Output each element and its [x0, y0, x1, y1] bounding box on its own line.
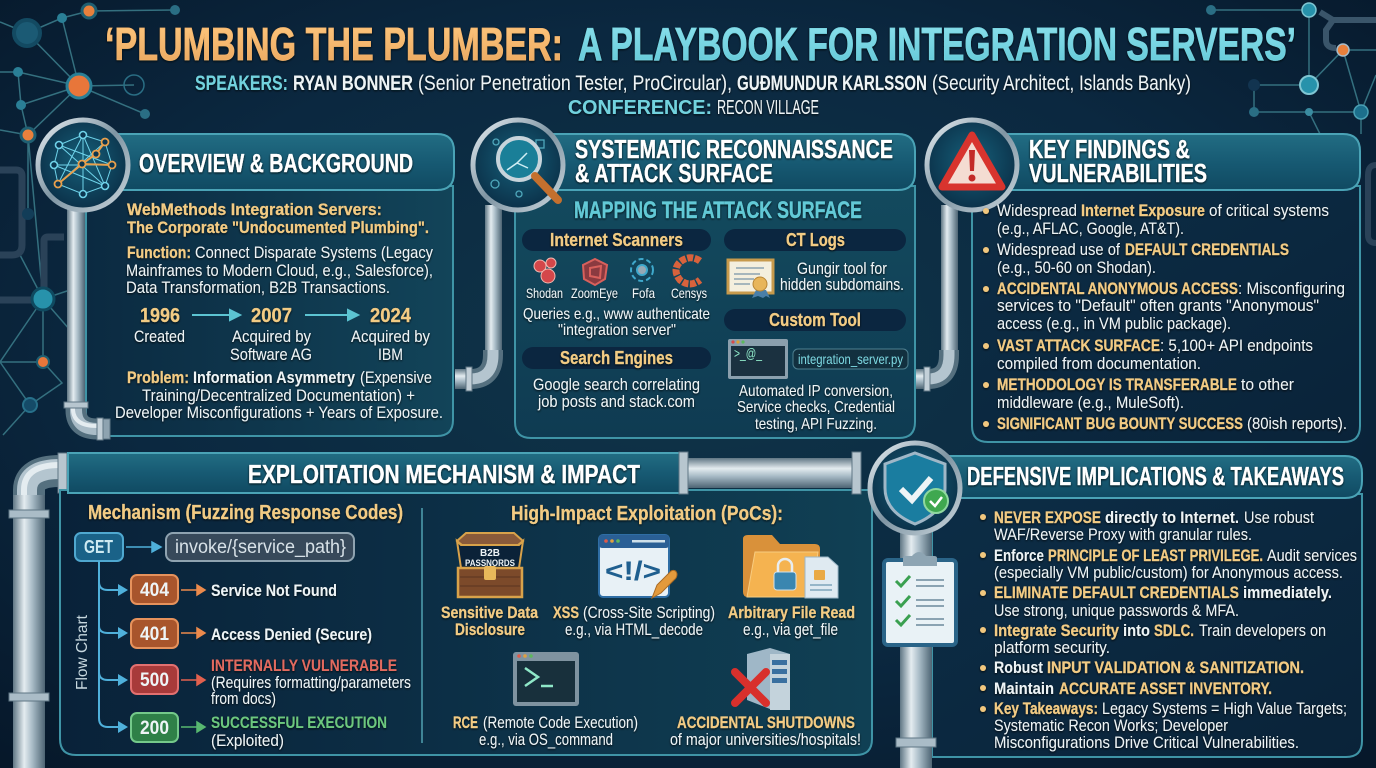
- sensitive data label: Sensitive Data: [441, 603, 538, 622]
- pill: custom tool: [724, 309, 906, 331]
- pill: internet scanners: Internet Scanners: [550, 230, 683, 250]
- icon: clipboard checklist: [884, 552, 956, 645]
- shutdowns label: [670, 713, 861, 749]
- scanner labels: Shodan: [526, 285, 563, 301]
- findings bullets: Widespread: [997, 201, 1077, 220]
- icon: zoomeye: [583, 259, 607, 285]
- title: [105, 18, 1296, 70]
- defensive bullets: Enforce: [994, 546, 1044, 565]
- arrow: [305, 310, 358, 320]
- xss label: (Cross-Site Scripting): [583, 603, 715, 622]
- findings bullets: Widespread use of: [997, 240, 1120, 259]
- findings heading: VULNERABILITIES: [1029, 158, 1207, 188]
- overview body: [86, 186, 453, 436]
- findings bullets: : Misconfiguring: [1238, 279, 1345, 298]
- timeline: [134, 305, 430, 364]
- conference line: RECON VILLAGE: [717, 97, 819, 119]
- findings bullets: : 5,100+ API endpoints: [1160, 336, 1313, 355]
- timeline 2007: Software AG: [230, 345, 312, 364]
- background network: top right: [1206, 3, 1376, 243]
- code 401 row: Access Denied (Secure): [211, 625, 372, 644]
- arrow: [192, 310, 240, 320]
- xss label: XSS: [553, 603, 579, 622]
- code 500 row: (Requires formatting/parameters: [211, 673, 411, 692]
- flow chart label: Flow Chart: [74, 614, 91, 690]
- defensive bullets: PRINCIPLE OF LEAST PRIVILEGE.: [1048, 546, 1263, 565]
- problem text: [115, 368, 443, 422]
- findings heading: [1029, 134, 1207, 188]
- overview intro text: WebMethods Integration Servers:: [127, 200, 382, 219]
- file read label: [728, 603, 855, 639]
- icon: shodan: [534, 258, 556, 283]
- flow chart branch lines: [99, 561, 122, 727]
- code 200 row: 200: [140, 718, 169, 739]
- panel: defensive implications: [870, 443, 1362, 768]
- icon: warning badge: [927, 120, 1017, 210]
- custom tool text: [737, 383, 895, 433]
- defensive bullets: Robust: [994, 658, 1043, 677]
- panel: exploitation mechanism and impact: [60, 452, 872, 755]
- icon: xss window: <!/>: [605, 556, 661, 586]
- timeline 2007: Acquired by: [232, 327, 311, 346]
- findings bullets: of critical systems: [1209, 201, 1329, 220]
- timeline 2007: [230, 305, 312, 364]
- defensive header bar: [930, 456, 1362, 498]
- pill: ct logs: [724, 229, 906, 251]
- recon connecting pipe: [455, 205, 502, 391]
- scanner labels: Censys: [671, 285, 707, 301]
- file read label: Arbitrary File Read: [728, 603, 855, 622]
- recon body: [515, 186, 915, 438]
- recon heading: SYSTEMATIC RECONNAISSANCE: [575, 134, 893, 164]
- defensive bullets: NEVER EXPOSE: [994, 508, 1101, 527]
- recon header bar: [540, 134, 915, 190]
- function text: [126, 243, 433, 297]
- speakers line: SPEAKERS:: [195, 72, 288, 95]
- findings body: [972, 186, 1360, 442]
- speakers line: [195, 72, 1191, 95]
- findings bullets: METHODOLOGY IS TRANSFERABLE: [997, 375, 1237, 394]
- panel: overview and background: [38, 120, 454, 440]
- findings bullets: DEFAULT CREDENTIALS: [1125, 240, 1289, 259]
- problem text: Developer Misconfigurations + Years of Exposure.: [115, 403, 443, 422]
- defensive bullets: Maintain: [994, 679, 1054, 698]
- icon: censys: [676, 258, 700, 284]
- icon: shield badge: [870, 443, 960, 533]
- findings bullets: VAST ATTACK SURFACE: [997, 336, 1160, 355]
- timeline 1996: [134, 305, 185, 346]
- scanner labels: [526, 285, 707, 301]
- pill: search engines: [522, 347, 711, 369]
- function text: Function:: [127, 243, 191, 262]
- findings connecting pipe: [916, 205, 958, 391]
- code 500 row: 500: [140, 670, 169, 691]
- arrow: [126, 542, 161, 552]
- pill: search engines: Search Engines: [560, 348, 673, 368]
- panel: key findings: [916, 120, 1360, 442]
- timeline 2007: 2007: [251, 305, 292, 327]
- code 200 row: SUCCESSFUL EXECUTION: [211, 713, 387, 732]
- findings bullets: ACCIDENTAL ANONYMOUS ACCESS: [997, 279, 1238, 298]
- file name pill: integration_server.py: [798, 351, 903, 367]
- shutdowns label: of major universities/hospitals!: [670, 730, 861, 749]
- function text: Connect Disparate Systems (Legacy: [195, 243, 433, 262]
- defensive vertical pipe: [896, 530, 936, 768]
- conference line: CONFERENCE:: [568, 97, 712, 119]
- defensive bullets: Key Takeaways:: [994, 699, 1098, 718]
- icon: magnifier badge: [473, 120, 563, 210]
- timeline 2024: Acquired by: [351, 327, 430, 346]
- recon heading: & ATTACK SURFACE: [575, 158, 773, 188]
- speakers line: (Senior Penetration Tester, ProCircular),: [418, 72, 732, 95]
- problem text: Training/Decentralized Documentation) +: [142, 386, 415, 405]
- findings bullets: (e.g., AFLAC, Google, AT&T).: [997, 219, 1184, 238]
- speakers line: (Security Architect, Islands Banky): [932, 72, 1191, 95]
- scanner labels: ZoomEye: [571, 285, 618, 301]
- xss label: [553, 603, 715, 639]
- invoke box: invoke/{service_path}: [175, 537, 346, 558]
- code 200 row: (Exploited): [211, 731, 284, 750]
- icon: network badge: [38, 120, 128, 210]
- defensive bullets: ELIMINATE DEFAULT CREDENTIALS: [994, 583, 1239, 602]
- findings bullets: access (e.g., in VM public package).: [997, 314, 1231, 333]
- exploitation heading: EXPLOITATION MECHANISM & IMPACT: [248, 459, 640, 489]
- findings bullets: compiled from documentation.: [997, 354, 1201, 373]
- ct logs text: hidden subdomains.: [780, 275, 904, 294]
- timeline 2024: [351, 305, 430, 364]
- defensive bullets: Use robust: [1244, 508, 1314, 527]
- code 401 row: 401: [140, 624, 169, 645]
- search engines text: job posts and stack.com: [537, 392, 695, 411]
- sensitive data label: [441, 603, 538, 639]
- timeline 2024: IBM: [378, 345, 403, 364]
- defensive bullets: ACCURATE ASSET INVENTORY.: [1059, 679, 1272, 698]
- code 404 row: 404: [140, 580, 169, 601]
- ct logs text: Gungir tool for: [797, 259, 887, 278]
- code 500 row: INTERNALLY VULNERABLE: [211, 656, 397, 675]
- speakers line: RYAN BONNER: [293, 72, 413, 95]
- overview intro text: The Corporate "Undocumented Plumbing".: [127, 218, 429, 237]
- defensive bullets: Misconfigurations Drive Critical Vulnerabilities.: [994, 733, 1299, 752]
- defensive bullets: SDLC.: [1154, 621, 1194, 640]
- code 404 row: [131, 575, 337, 604]
- mechanism heading: Mechanism (Fuzzing Response Codes): [88, 502, 403, 524]
- icon: treasure chest: [457, 533, 523, 597]
- overview intro text: [127, 200, 429, 237]
- defensive bullets: Use strong, unique passwords & MFA.: [994, 601, 1239, 620]
- findings bullets: services to "Default" often grants "Anonymous": [997, 296, 1319, 315]
- icon: treasure chest: PASSNORDS: [465, 558, 515, 568]
- findings bullets: [983, 201, 1347, 433]
- code 200 row: [131, 713, 387, 750]
- code 500 row: from docs): [211, 689, 276, 708]
- ct logs text: [780, 259, 904, 294]
- pill: ct logs: CT Logs: [786, 230, 845, 250]
- high-impact heading: High-Impact Exploitation (PoCs):: [511, 503, 783, 525]
- get box: [75, 533, 123, 561]
- exploitation header bar: [68, 453, 680, 493]
- search engines text: Google search correlating: [533, 375, 700, 394]
- findings bullets: middleware (e.g., MuleSoft).: [997, 393, 1184, 412]
- findings bullets: SIGNIFICANT BUG BOUNTY SUCCESS: [997, 414, 1243, 433]
- overview pipe: [64, 205, 110, 440]
- icon: locked folder: [743, 535, 838, 598]
- problem text: (Expensive: [360, 368, 432, 387]
- defensive bullets: Integrate Security: [994, 621, 1119, 640]
- code 500 row: [131, 656, 411, 708]
- file read label: e.g., via get_file: [743, 620, 838, 639]
- overview heading: OVERVIEW & BACKGROUND: [139, 148, 413, 178]
- title: ‘PLUMBING THE PLUMBER:: [105, 18, 563, 70]
- code 401 row: [131, 619, 372, 648]
- function text: Data Transformation, B2B Transactions.: [126, 278, 390, 297]
- findings header bar: [995, 134, 1360, 190]
- function text: Mainframes to Modern Cloud, e.g., Salesforce),: [126, 261, 433, 280]
- file name pill: [793, 349, 908, 369]
- problem text: Problem:: [127, 368, 189, 387]
- defensive bullets: Audit services: [1267, 546, 1357, 565]
- code 404 row: Service Not Found: [211, 581, 337, 600]
- icon: certificate: [728, 260, 773, 298]
- defensive bullets: [980, 508, 1357, 752]
- icon: terminal: >_@_: [734, 345, 762, 361]
- scanner query text: "integration server": [558, 322, 676, 339]
- column divider: [421, 508, 423, 743]
- icon: rce terminal: [513, 652, 579, 706]
- pill: custom tool: Custom Tool: [769, 310, 861, 330]
- custom tool text: Automated IP conversion,: [739, 383, 893, 400]
- rce label: e.g., via OS_command: [479, 730, 613, 749]
- xss label: e.g., via HTML_decode: [565, 620, 703, 639]
- rce label: [453, 713, 638, 749]
- timeline 1996: 1996: [140, 305, 180, 327]
- search engines text: [533, 375, 700, 411]
- findings bullets: Internet Exposure: [1081, 201, 1205, 220]
- shutdowns label: ACCIDENTAL SHUTDOWNS: [677, 713, 855, 732]
- findings bullets: (80ish reports).: [1247, 414, 1347, 433]
- findings bullets: to other: [1241, 375, 1294, 394]
- sensitive data label: Disclosure: [455, 620, 525, 639]
- background network: top left: [0, 4, 180, 435]
- scanner labels: Fofa: [632, 285, 655, 301]
- icon: fofa: [631, 259, 653, 281]
- scanner query text: Queries e.g., www authenticate: [523, 306, 710, 323]
- get box: GET: [84, 537, 113, 557]
- defensive bullets: platform security.: [994, 638, 1110, 657]
- header connecting pipe: [679, 452, 861, 494]
- conference line: [568, 97, 819, 119]
- icon: treasure chest: B2B: [480, 548, 500, 559]
- scanner query text: [523, 306, 710, 339]
- findings heading: KEY FINDINGS &: [1029, 134, 1190, 164]
- icon: server with red x: [735, 648, 790, 710]
- rce label: (Remote Code Execution): [483, 713, 638, 732]
- problem text: Information Asymmetry: [193, 368, 355, 387]
- speakers line: GUÐMUNDUR KARLSSON: [737, 72, 927, 95]
- custom tool text: testing, API Fuzzing.: [755, 416, 877, 433]
- panel: systematic reconnaissance: [455, 120, 915, 438]
- overview header bar: [100, 134, 454, 190]
- defensive bullets: immediately.: [1243, 583, 1332, 602]
- exploitation body: [60, 490, 872, 755]
- defensive bullets: into: [1123, 621, 1150, 640]
- recon heading: [575, 134, 893, 188]
- defensive bullets: Train developers on: [1199, 621, 1326, 640]
- branch arrowheads: [118, 584, 128, 733]
- findings bullets: (e.g., 50-60 on Shodan).: [997, 258, 1156, 277]
- timeline 1996: Created: [134, 327, 185, 346]
- left vertical pipe: [9, 453, 67, 768]
- defensive bullets: WAF/Reverse Proxy with granular rules.: [994, 525, 1252, 544]
- defensive bullets: Systematic Recon Works; Developer: [994, 716, 1228, 735]
- rce label: RCE: [453, 713, 478, 732]
- icon: xss window: [599, 535, 677, 598]
- icon: terminal: [728, 339, 788, 379]
- defensive body: [932, 494, 1362, 757]
- defensive bullets: directly to Internet.: [1105, 508, 1239, 527]
- timeline 2024: 2024: [370, 305, 412, 327]
- mapping subheading: MAPPING THE ATTACK SURFACE: [574, 197, 862, 224]
- defensive bullets: INPUT VALIDATION & SANITIZATION.: [1047, 658, 1304, 677]
- custom tool text: Service checks, Credential: [737, 399, 895, 416]
